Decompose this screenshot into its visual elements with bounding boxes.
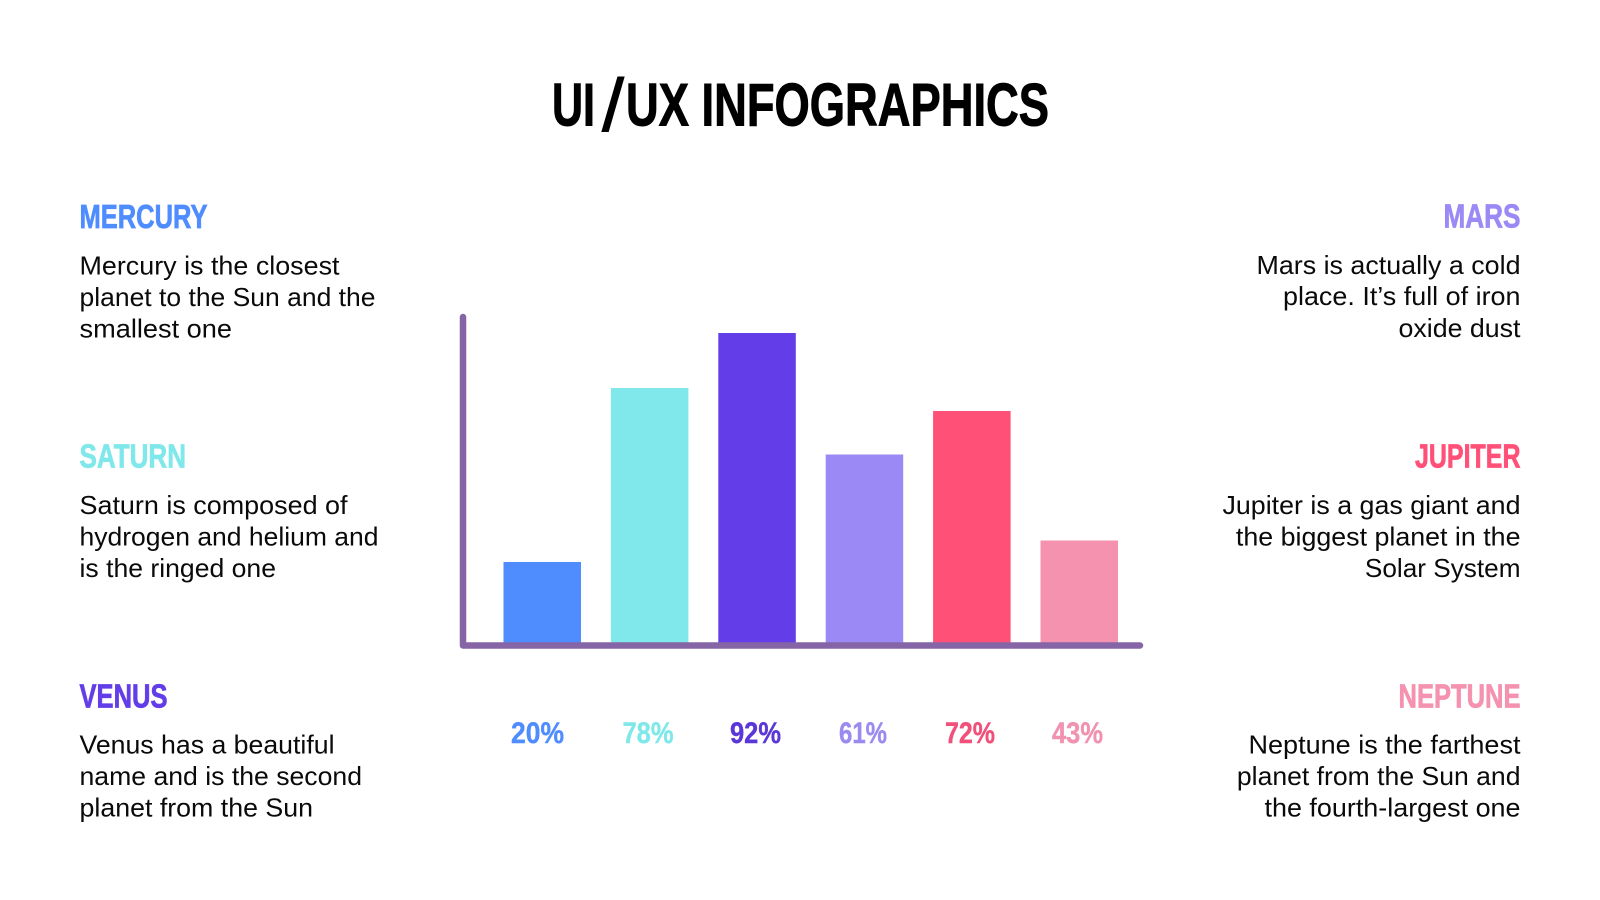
text block: mercury: smallest one	[80, 314, 232, 344]
title	[552, 64, 1049, 147]
text block: mercury: Mercury is the closest	[80, 250, 340, 280]
bar: mercury 20%	[504, 562, 581, 642]
title: UI	[552, 72, 595, 138]
text block: saturn	[80, 490, 378, 583]
text block: saturn: hydrogen and helium and	[80, 522, 378, 552]
label: 61%: 61%	[839, 717, 887, 750]
title: UX INFOGRAPHICS	[626, 72, 1049, 138]
panel: saturn	[80, 438, 378, 583]
label: 43%: 43%	[1052, 717, 1103, 750]
heading: jupiter: JUPITER	[1415, 438, 1521, 474]
heading: saturn: SATURN	[80, 438, 186, 474]
text block: jupiter: the biggest planet in the	[1236, 522, 1520, 552]
text block: venus: planet from the Sun	[80, 793, 313, 823]
chart axes	[463, 317, 1140, 646]
text block: mars	[1256, 250, 1521, 343]
text block: venus: name and is the second	[80, 761, 362, 791]
label: 72%: 72%	[945, 717, 995, 750]
text block: neptune: Neptune is the farthest	[1248, 729, 1521, 759]
bar: saturn 78%	[611, 388, 688, 642]
label: 92%: 92%	[730, 717, 781, 750]
bar: neptune 43%	[1040, 540, 1118, 642]
panel: mercury	[80, 198, 376, 344]
percentage labels	[511, 717, 1103, 750]
text block: mars: oxide dust	[1398, 313, 1521, 343]
bar: jupiter 72%	[933, 411, 1011, 642]
text block: neptune: planet from the Sun and	[1237, 761, 1520, 791]
text block: saturn: Saturn is composed of	[80, 490, 348, 520]
panel: jupiter	[1222, 438, 1521, 583]
label: 20%: 20%	[511, 717, 564, 750]
text block: neptune	[1237, 729, 1521, 823]
heading: venus: VENUS	[80, 678, 168, 714]
bar: venus 92%	[718, 333, 796, 642]
title: /	[602, 64, 624, 147]
text block: venus: Venus has a beautiful	[80, 729, 334, 759]
panel: mars	[1256, 198, 1521, 343]
heading: mercury: MERCURY	[80, 198, 208, 235]
text block: jupiter: Solar System	[1365, 553, 1520, 583]
panel: venus	[80, 678, 362, 823]
text block: saturn: is the ringed one	[80, 553, 276, 583]
bar: mars 61%	[826, 454, 903, 642]
text block: neptune: the fourth-largest one	[1264, 793, 1520, 823]
heading: neptune: NEPTUNE	[1398, 678, 1520, 714]
text block: mars: Mars is actually a cold	[1256, 250, 1520, 280]
text block: jupiter: Jupiter is a gas giant and	[1222, 490, 1520, 520]
text block: jupiter	[1222, 490, 1520, 583]
label: 78%: 78%	[622, 717, 674, 750]
text block: mercury: planet to the Sun and the	[80, 282, 376, 312]
text block: venus	[80, 729, 362, 823]
heading: mars: MARS	[1444, 198, 1520, 234]
text block: mars: place. It’s full of iron	[1283, 281, 1520, 311]
text block: mercury	[80, 250, 376, 344]
panel: neptune	[1237, 678, 1521, 823]
bar chart	[463, 317, 1140, 646]
